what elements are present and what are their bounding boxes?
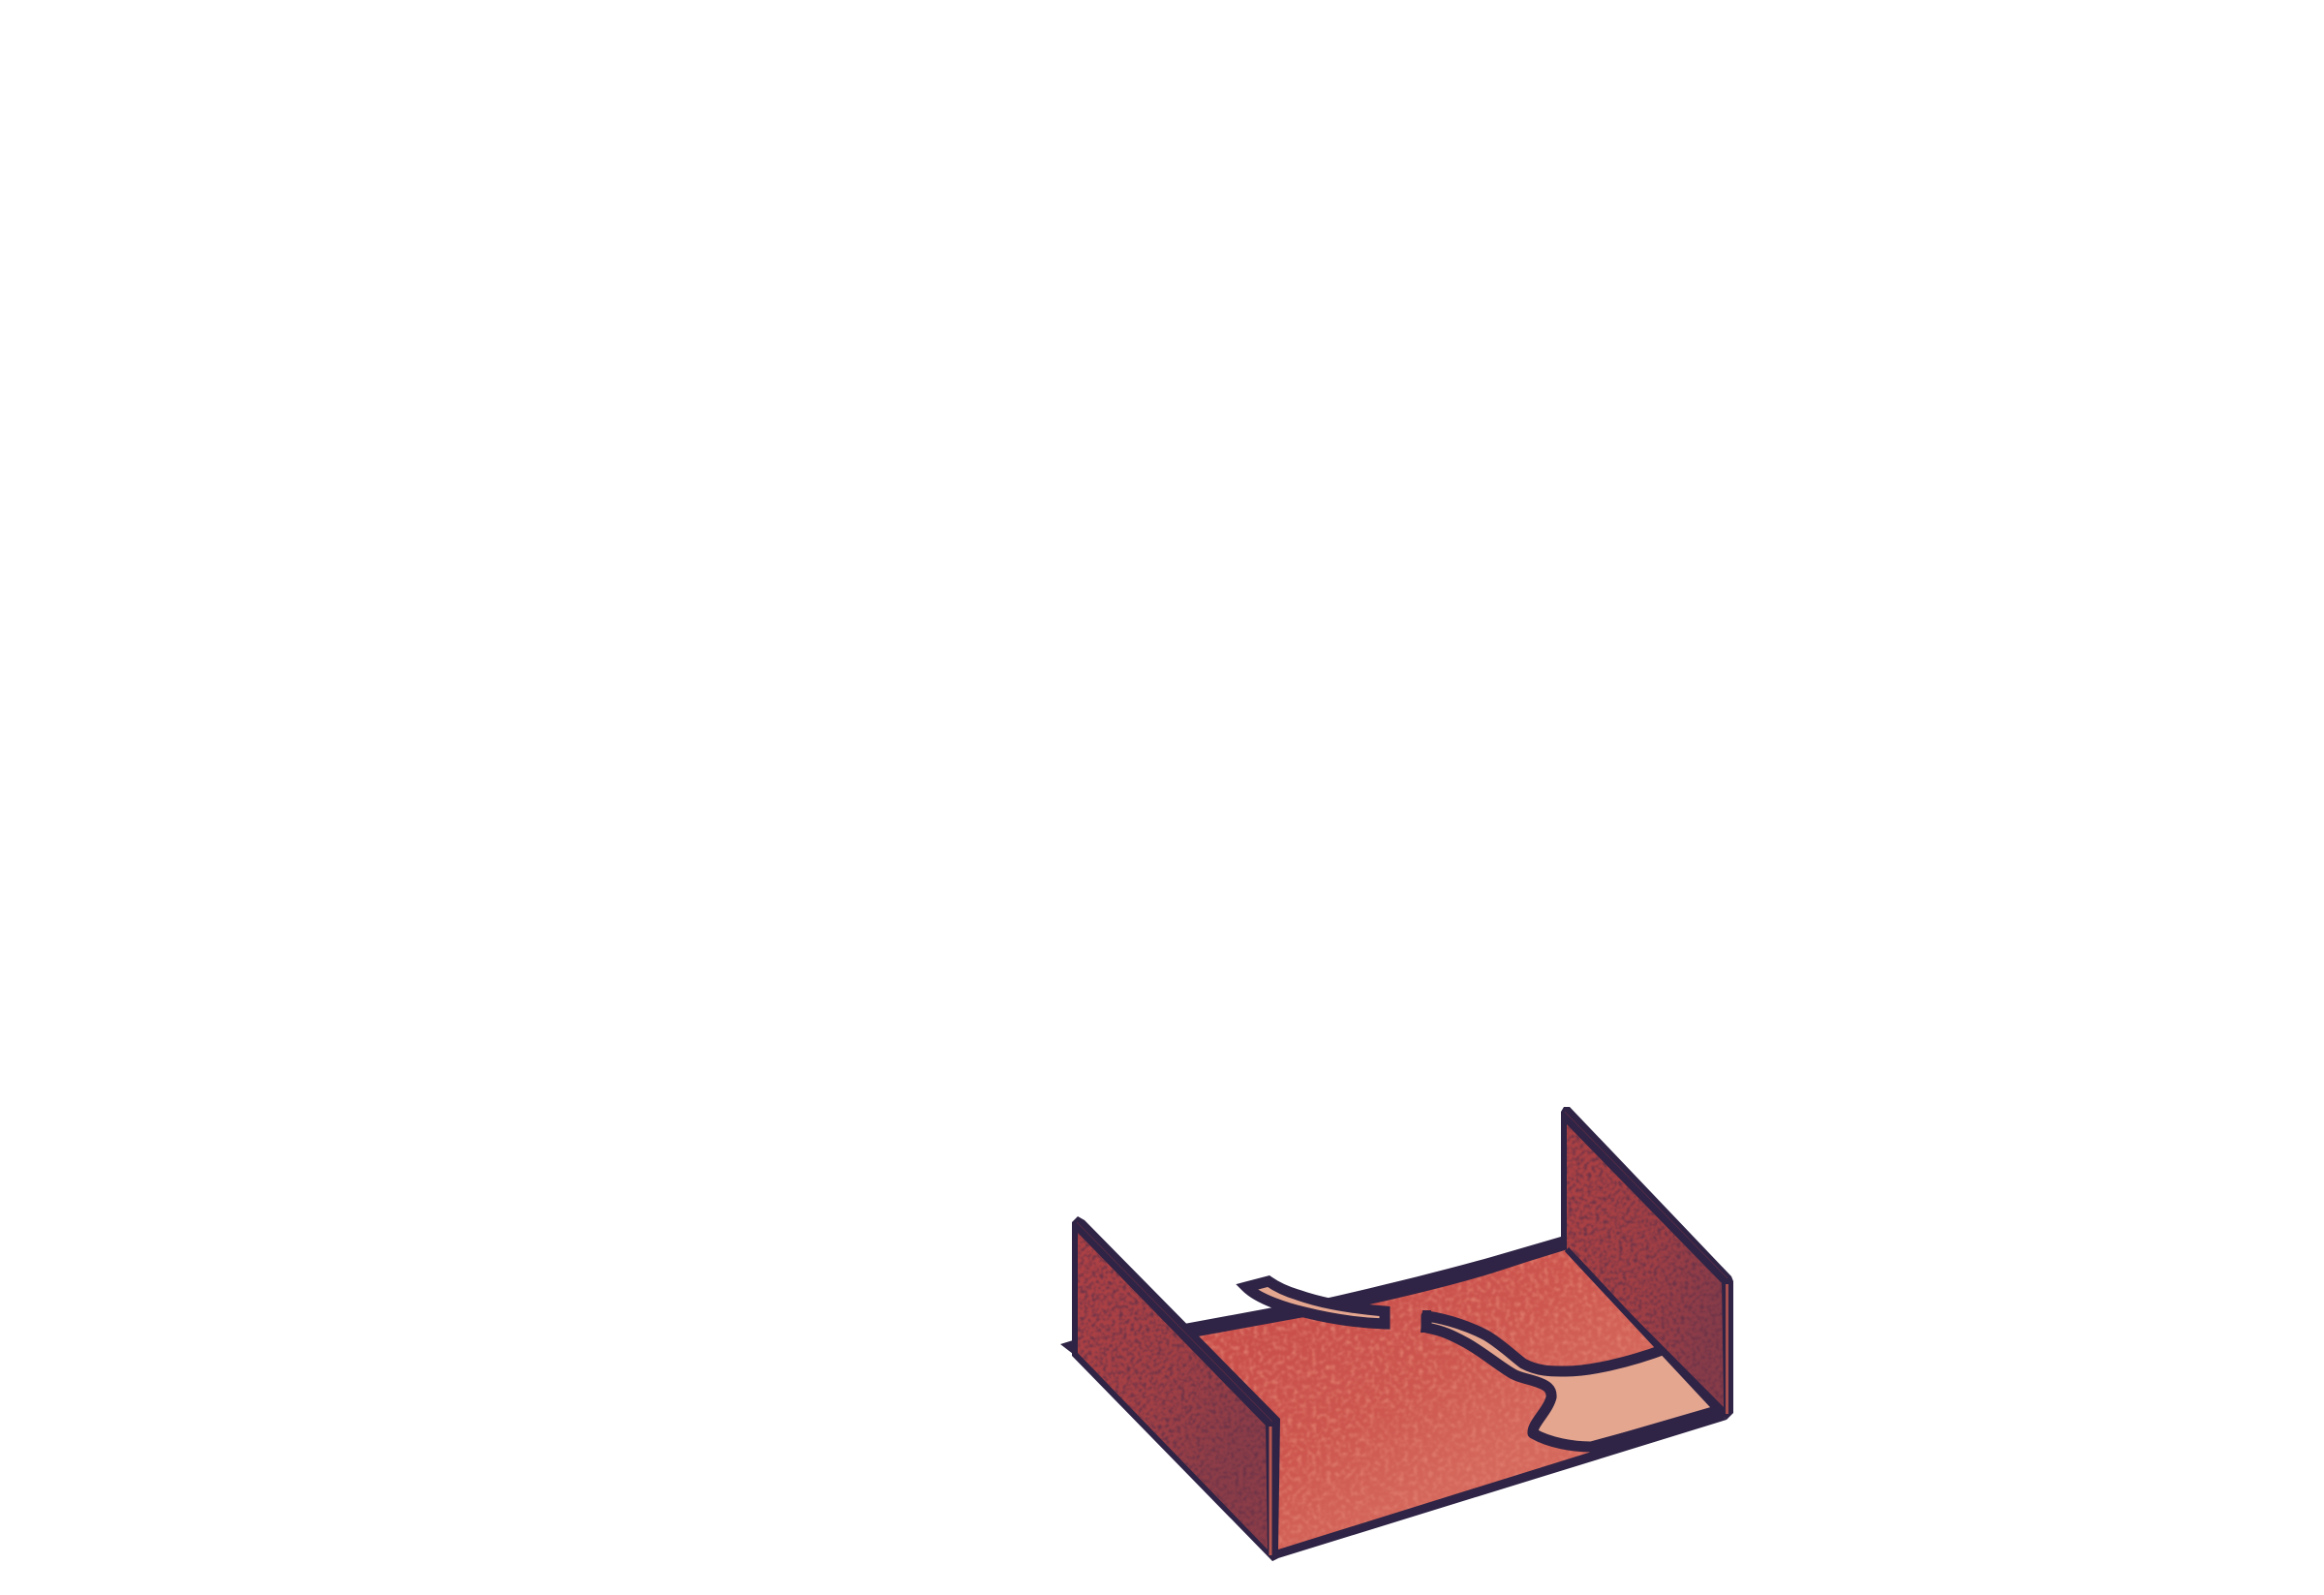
river upper fragment — [1246, 1281, 1385, 1324]
back wall edge — [1184, 1237, 1568, 1336]
left wall — [1060, 1216, 1280, 1561]
floor panel — [1193, 1247, 1718, 1555]
right wall — [1561, 1107, 1733, 1420]
front floor edge — [1272, 1406, 1727, 1561]
river main channel — [1421, 1310, 1728, 1447]
